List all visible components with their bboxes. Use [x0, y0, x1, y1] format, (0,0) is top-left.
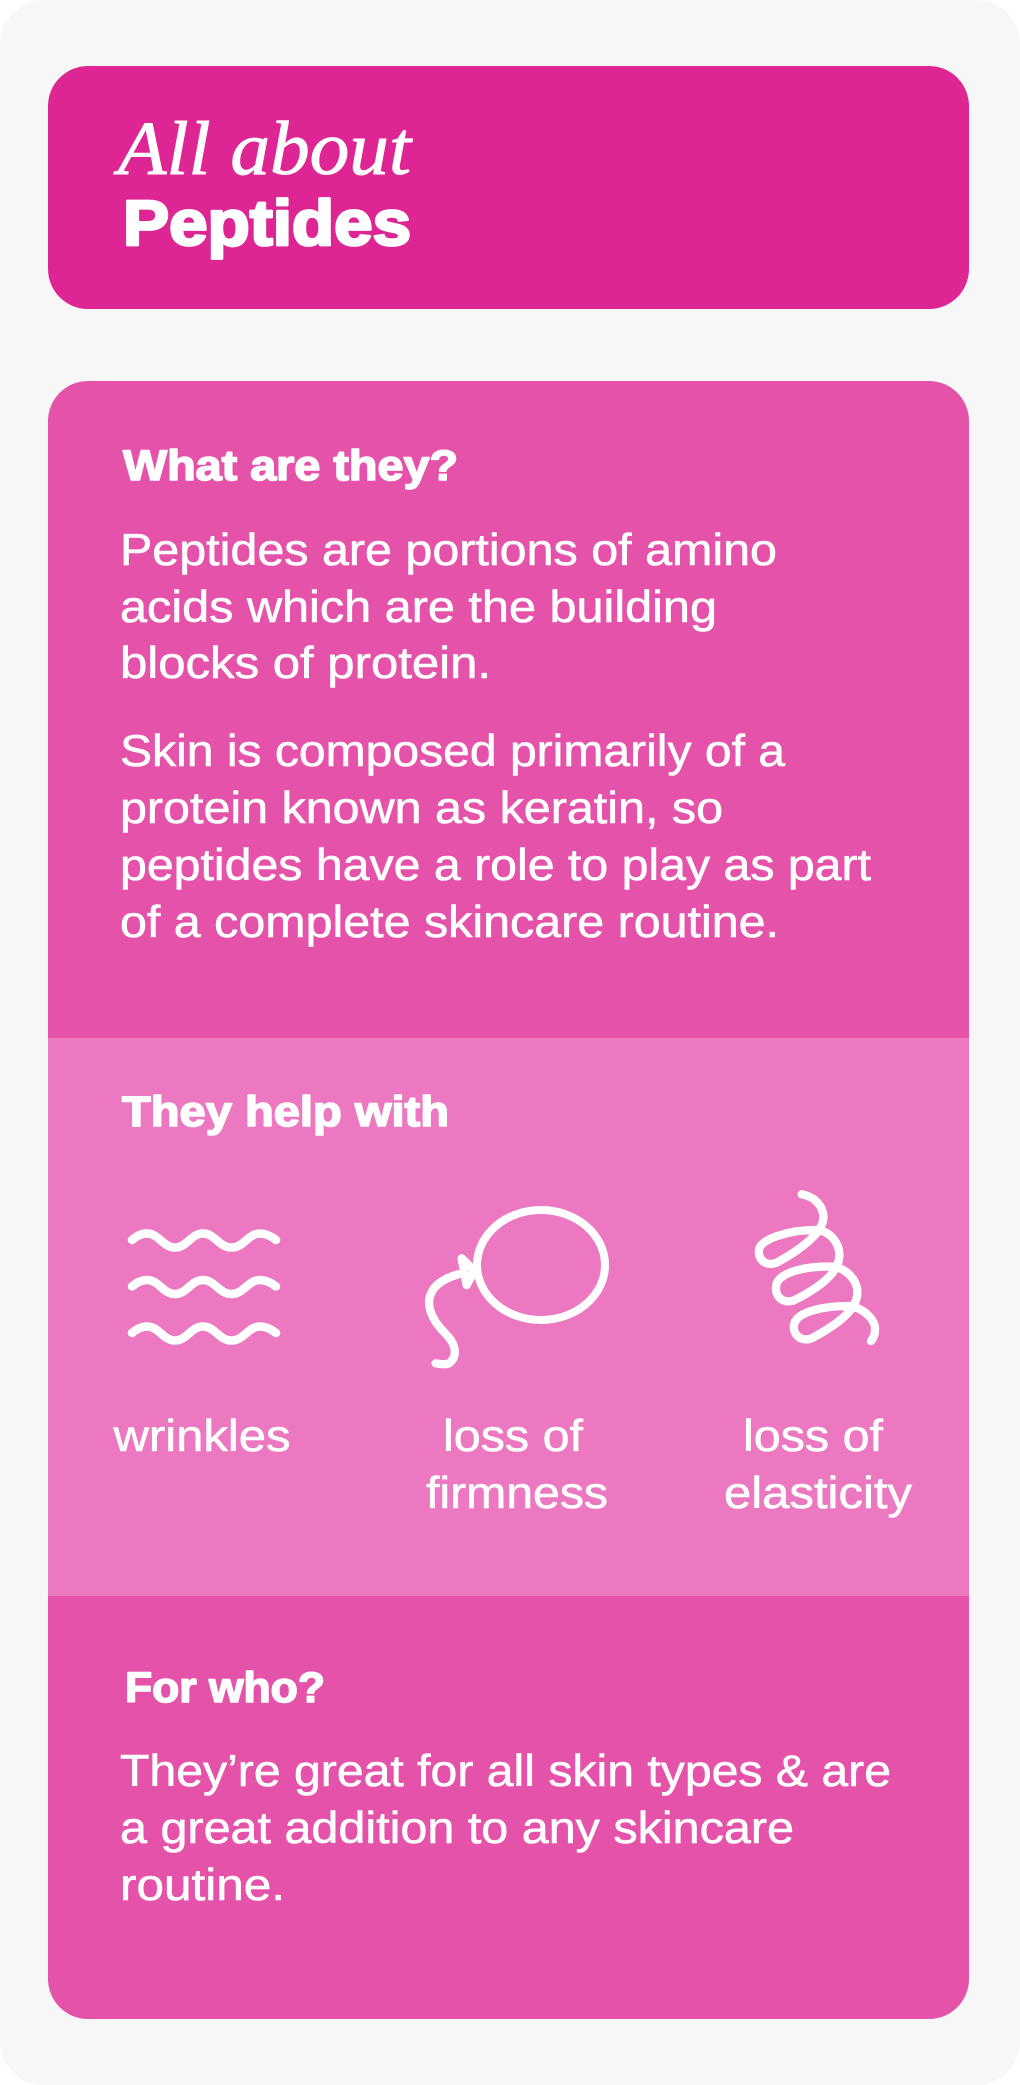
panel: they help with — [48, 1038, 969, 1596]
text block: skin types: a great addition to any skincare — [120, 1804, 794, 1853]
heading: They help with: They help with — [122, 1088, 449, 1136]
text block: skin and keratin: of a complete skincare routine. — [120, 898, 779, 947]
heading: What are they?: What are they? — [123, 442, 458, 490]
label: loss of firmness: loss of — [443, 1412, 584, 1461]
text block: skin types: They’re great for all skin types & are — [120, 1747, 891, 1796]
panel: what are they — [48, 381, 969, 1038]
label: loss of elasticity: elasticity — [724, 1469, 913, 1518]
text block: definition: acids which are the building — [120, 583, 717, 632]
label: loss of elasticity: loss of — [743, 1412, 884, 1461]
label: loss of firmness: firmness — [426, 1469, 608, 1518]
label: wrinkles: wrinkles — [112, 1412, 290, 1461]
panel: title banner — [48, 66, 969, 309]
label: loss of elasticity — [724, 1412, 913, 1518]
text block: skin and keratin — [120, 727, 872, 947]
text block: definition: blocks of protein. — [120, 639, 491, 688]
icon: spring for elasticity — [759, 1194, 875, 1341]
heading: For who?: For who? — [125, 1664, 325, 1712]
text block: skin and keratin: peptides have a role to play as part — [120, 841, 872, 890]
panel: for who — [48, 1596, 969, 2019]
text block: skin and keratin: protein known as keratin, so — [120, 784, 723, 833]
icon: wrinkles waves — [132, 1234, 276, 1340]
icon: balloon losing firmness — [429, 1210, 605, 1364]
text block: skin and keratin: Skin is composed primarily of a — [120, 727, 785, 776]
label: loss of firmness — [426, 1412, 608, 1518]
title: Peptides: Peptides — [123, 187, 411, 259]
text block: definition: Peptides are portions of amino — [120, 526, 777, 575]
title: All about: All about — [113, 107, 413, 191]
text block: skin types: routine. — [120, 1861, 285, 1910]
text block: definition — [120, 526, 777, 688]
text block: skin types — [120, 1747, 891, 1910]
